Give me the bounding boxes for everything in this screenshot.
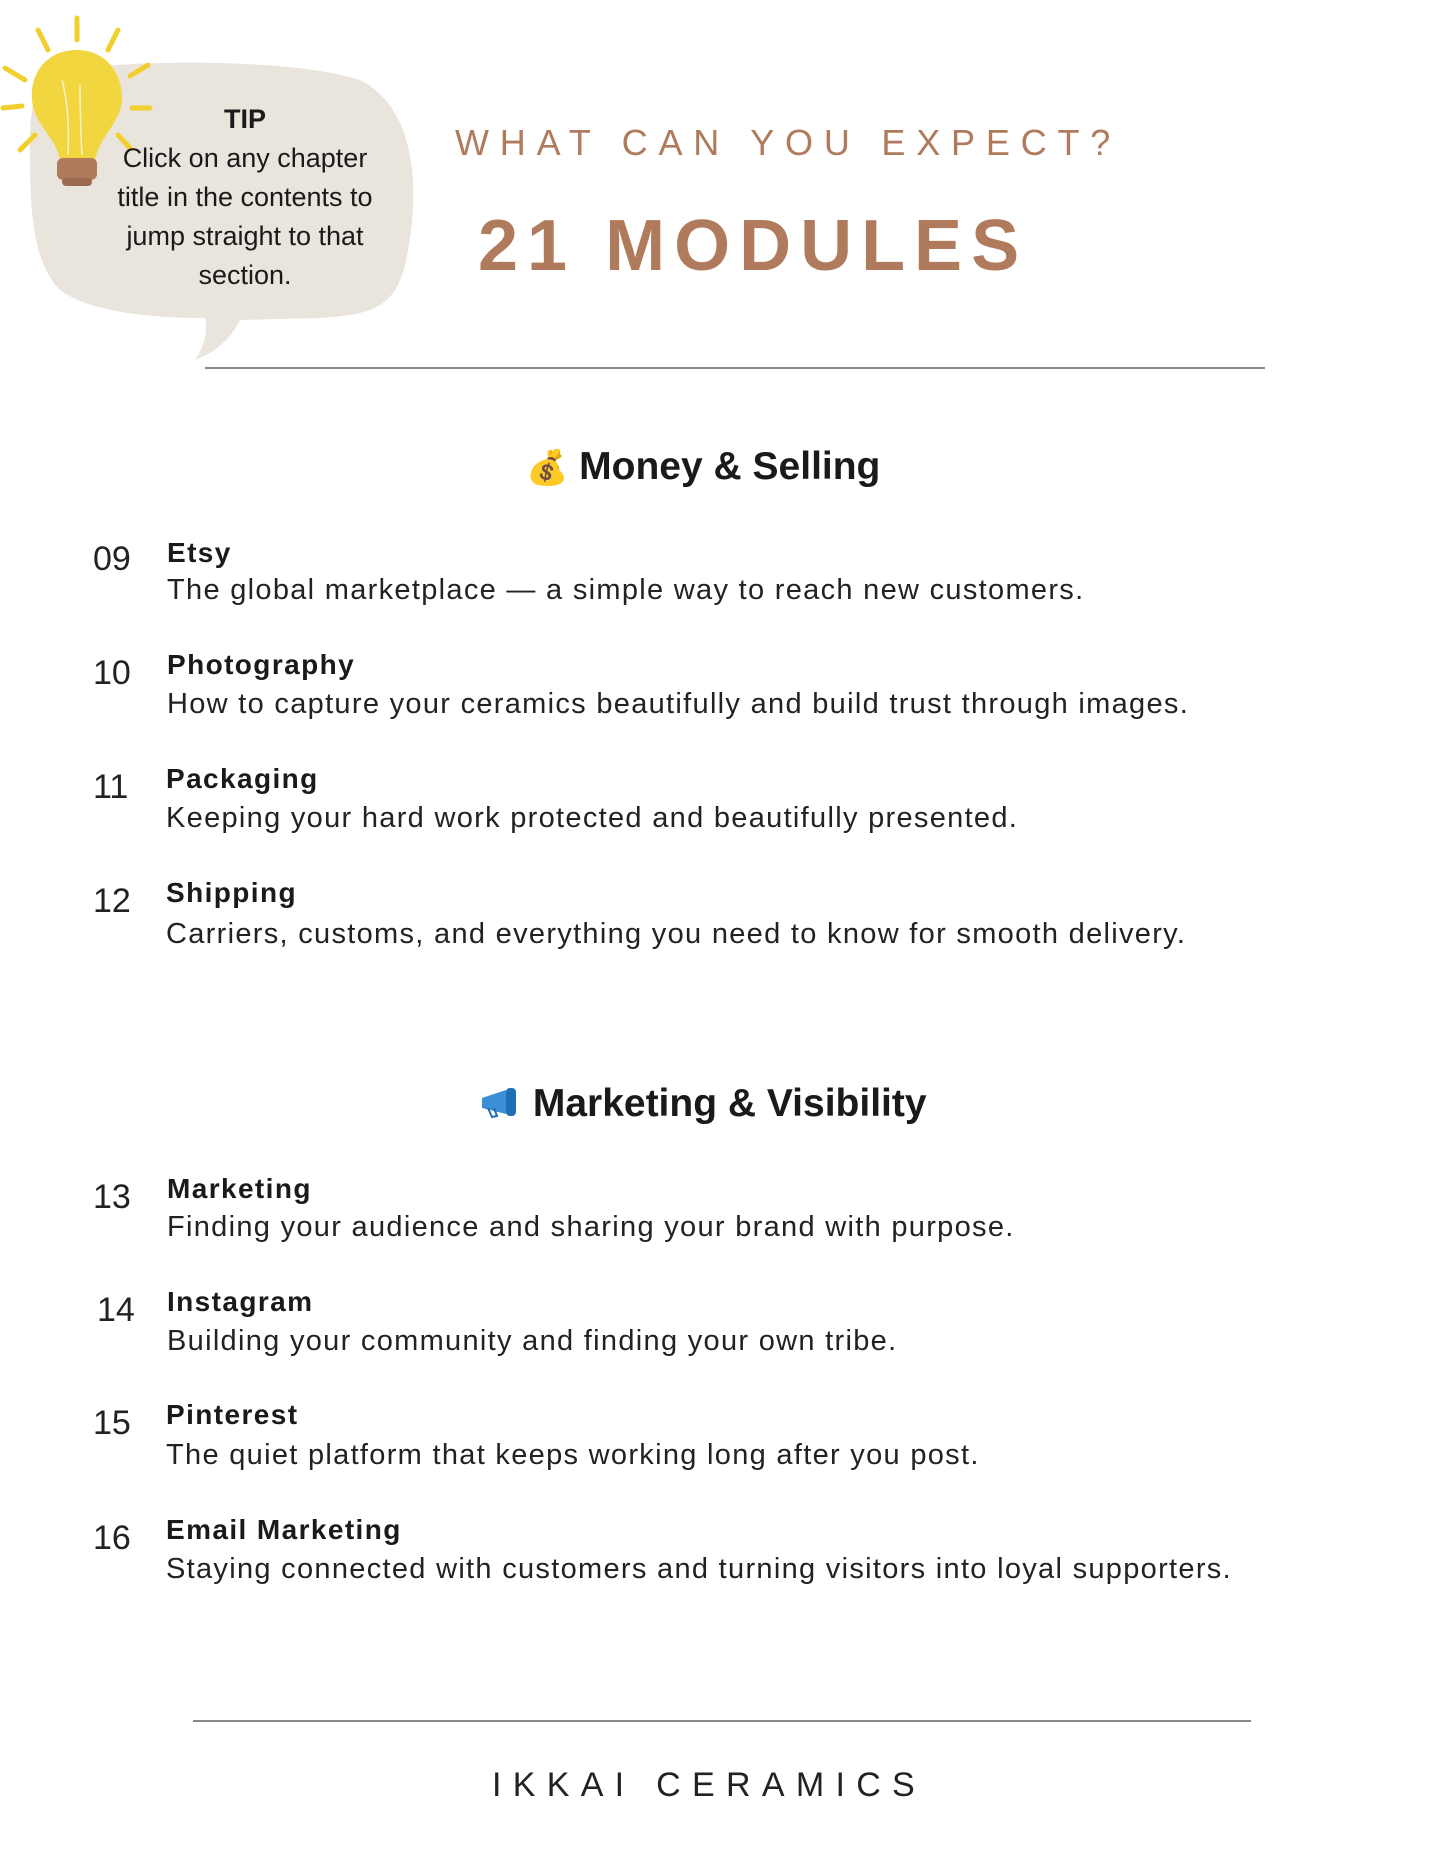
item 10: How to capture your ceramics beautifully and build trust through images.	[167, 688, 1189, 720]
tip text: TIP	[224, 104, 266, 134]
item 13: Finding your audience and sharing your brand with purpose.	[167, 1211, 1015, 1243]
tip text	[117, 104, 373, 290]
bubble shape	[30, 63, 413, 360]
item 11: Packaging	[166, 763, 319, 794]
item 09	[93, 537, 1084, 606]
item 16: Staying connected with customers and turning visitors into loyal supporters.	[166, 1553, 1232, 1585]
item 14: Building your community and finding your own tribe.	[167, 1325, 897, 1357]
item 14	[97, 1286, 897, 1357]
item 10	[93, 649, 1189, 720]
item 09: 09	[93, 540, 131, 578]
icon: light bulb	[0, 16, 152, 186]
item 12	[93, 877, 1186, 950]
item 09: The global marketplace — a simple way to reach new customers.	[167, 574, 1084, 606]
main title: 21 MODULES	[478, 206, 1028, 286]
item 14: 14	[97, 1291, 135, 1329]
section heading: Marketing & Visibility: Marketing & Visibility	[533, 1082, 927, 1125]
item 13: Marketing	[167, 1173, 312, 1204]
item 11: 11	[93, 768, 128, 806]
item 09: Etsy	[167, 537, 232, 568]
item 10: 10	[93, 654, 131, 692]
tip text: section.	[198, 260, 292, 290]
item 15: The quiet platform that keeps working long after you post.	[166, 1439, 980, 1471]
item 12: Shipping	[166, 877, 297, 908]
item 11	[93, 763, 1018, 834]
section heading: Money & Selling: 💰 Money & Selling	[526, 445, 880, 488]
item 13	[93, 1173, 1015, 1243]
item 16: 16	[93, 1519, 131, 1557]
footer brand: IKKAI CERAMICS	[492, 1766, 926, 1804]
tip text: title in the contents to	[117, 182, 373, 212]
item 13: 13	[93, 1178, 131, 1216]
speech bubble with tip	[0, 16, 414, 360]
subtitle: WHAT CAN YOU EXPECT?	[455, 122, 1121, 163]
item 14: Instagram	[167, 1286, 313, 1317]
item 12: 12	[93, 882, 131, 920]
item 15: Pinterest	[166, 1399, 298, 1430]
item 10: Photography	[167, 649, 355, 680]
item 15	[93, 1399, 980, 1471]
item 15: 15	[93, 1404, 131, 1442]
tip text: jump straight to that	[126, 221, 364, 251]
item 16	[93, 1514, 1232, 1585]
item 16: Email Marketing	[166, 1514, 402, 1545]
tip text: Click on any chapter	[123, 143, 367, 173]
item 12: Carriers, customs, and everything you need to know for smooth delivery.	[166, 918, 1186, 950]
item 11: Keeping your hard work protected and beautifully presented.	[166, 802, 1018, 834]
